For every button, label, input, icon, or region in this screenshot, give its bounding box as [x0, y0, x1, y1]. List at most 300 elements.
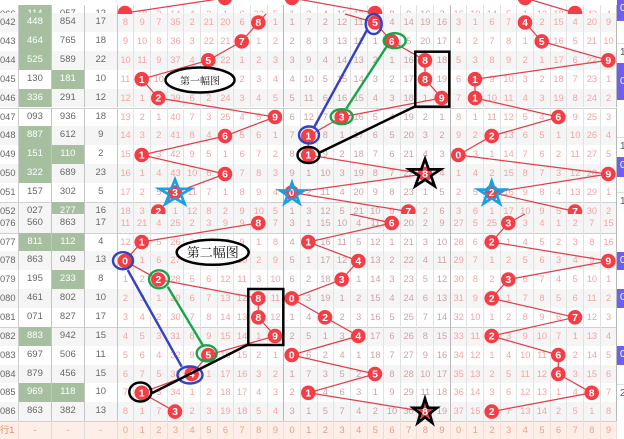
row 050: 3	[339, 168, 345, 178]
row 046: 39	[170, 93, 181, 103]
row 045: 7	[573, 74, 578, 84]
lower balls block two: 2	[322, 312, 328, 324]
row 083	[0, 346, 617, 365]
row 076: 9	[439, 218, 445, 228]
row 051: 9	[256, 187, 261, 197]
footer row: -	[66, 425, 69, 436]
row 050: 3	[556, 168, 561, 178]
row 042: 15	[553, 17, 564, 27]
row 076: 25	[487, 218, 497, 228]
row 043: 2	[273, 36, 278, 46]
row 082: 17	[370, 331, 381, 341]
row 044: 1	[240, 55, 245, 65]
row 050: 10	[320, 168, 331, 178]
row 079: 30	[453, 274, 464, 284]
row 077: 4	[523, 237, 528, 247]
row 085: 7	[606, 387, 611, 397]
row 044: 2	[256, 55, 261, 65]
row 076: 27	[453, 218, 464, 228]
row 051: 23	[403, 187, 414, 197]
row 066 clipped: 12	[354, 9, 364, 19]
label: first figure	[166, 68, 234, 92]
row 086: 7	[156, 406, 161, 416]
row 081: 32	[453, 312, 464, 322]
row 047: 13	[120, 112, 131, 122]
row 042: 042	[0, 17, 16, 27]
lower balls block three: 8	[589, 388, 595, 400]
row 083: 6	[306, 350, 311, 360]
row 078: 1	[306, 255, 311, 265]
lower annotation: black link and box	[129, 289, 283, 402]
upper balls block two	[284, 15, 449, 219]
row 081: 3	[123, 312, 128, 322]
row 048: 2	[156, 130, 161, 140]
row 042: 7	[506, 17, 511, 27]
row 046: 24	[220, 93, 231, 103]
row 049: 42	[170, 149, 181, 159]
footer row: 8	[589, 425, 594, 435]
row 051: 4	[339, 187, 345, 197]
row 043: 2	[289, 36, 295, 46]
row 042: 2	[190, 17, 195, 27]
row 066 clipped: 14	[487, 9, 497, 19]
row 086: 19	[220, 406, 231, 416]
row 080: 29	[170, 293, 181, 303]
row 050: 1	[306, 168, 311, 178]
row 046: 8	[573, 93, 578, 103]
row 084: 2	[489, 368, 495, 378]
row 078: 17	[320, 255, 331, 265]
row 078: 3	[556, 255, 561, 265]
row 084: 5	[156, 368, 161, 378]
row 047: 40	[170, 112, 181, 122]
row 043: 1	[373, 36, 378, 46]
row 042: 4	[573, 17, 578, 27]
row 082: 14	[237, 331, 247, 341]
row 078: 2	[506, 255, 511, 265]
row 044	[0, 51, 617, 70]
row 084: 33	[170, 368, 181, 378]
row 044: 3	[273, 55, 278, 65]
row 049: 5	[206, 149, 211, 159]
row 076: 2	[190, 218, 195, 228]
row 079: 6	[523, 274, 528, 284]
row 046: 18	[403, 93, 414, 103]
row 046: 4	[523, 93, 528, 103]
row 084: 15	[95, 368, 106, 378]
row 086: 863	[27, 405, 43, 416]
row 077: 26	[170, 237, 181, 247]
upper annotation: green link	[331, 33, 406, 124]
upper balls block one: 6	[222, 169, 228, 181]
footer row: 7	[406, 425, 411, 435]
lower balls block one	[118, 216, 282, 419]
lower balls block one: 2	[155, 274, 161, 286]
row 042: 854	[60, 16, 76, 27]
row 076: 3	[289, 218, 295, 228]
row 042: 16	[437, 17, 447, 27]
row 083: 5	[606, 350, 611, 360]
lower balls block three: 2	[489, 406, 495, 418]
row 086: 8	[123, 406, 128, 416]
footer row: 9	[273, 425, 278, 435]
row 043: 13	[337, 36, 347, 46]
row 049: 9	[323, 149, 328, 159]
row 045: 9	[489, 74, 495, 84]
row 079: 12	[220, 274, 231, 284]
row 081: 827	[60, 311, 76, 322]
row 081: 10	[470, 312, 480, 322]
row 044: 5	[456, 55, 461, 65]
row 085: 10	[95, 386, 106, 397]
row 082: 9	[523, 331, 528, 341]
row 077: 3	[423, 237, 428, 247]
row 043: 3	[323, 36, 328, 46]
row 042: 2	[539, 17, 544, 27]
row 076: 15	[603, 218, 614, 228]
row 079: 7	[539, 274, 544, 284]
row 076: 4	[356, 218, 361, 228]
row 086: 1	[589, 406, 594, 416]
row 082: 5	[306, 331, 311, 341]
row 079: 5	[573, 274, 578, 284]
upper balls block two: 8	[422, 169, 428, 181]
row 044: 16	[403, 55, 414, 65]
row 084: 7	[140, 368, 145, 378]
footer row: 0	[289, 425, 295, 435]
footer row: 5	[539, 425, 544, 435]
row 047: 7	[323, 112, 328, 122]
row 085: 29	[403, 387, 414, 397]
row 080: 802	[60, 292, 76, 303]
row 043: 36	[170, 36, 181, 46]
row 081: 25	[403, 312, 414, 322]
row 078: 9	[589, 255, 594, 265]
row 044: 044	[0, 55, 16, 65]
row 077: 12	[120, 237, 131, 247]
row 084: 456	[60, 368, 76, 378]
row 044: 18	[437, 55, 447, 65]
row 066 clipped: 2	[439, 9, 445, 19]
upper balls block two: 0	[289, 187, 295, 199]
row 049: 7	[523, 149, 528, 159]
row 050: 1	[140, 168, 145, 178]
row 076: 3	[523, 218, 528, 228]
row 048: 4	[206, 130, 211, 140]
row 085: 4	[323, 387, 328, 397]
row 077: 077	[0, 237, 16, 247]
row 050: 10	[187, 168, 197, 178]
row 047: 19	[403, 112, 414, 122]
footer row: 1	[140, 425, 145, 435]
row 045: 3	[256, 74, 261, 84]
row 047: 11	[487, 112, 497, 122]
row 043: 21	[587, 36, 597, 46]
row 077: 11	[337, 237, 347, 247]
row 044: 4	[190, 55, 195, 65]
row 081: 4	[306, 312, 311, 322]
row 084: 3	[573, 368, 578, 378]
row 076: 3	[206, 218, 211, 228]
row 045: 1	[606, 74, 611, 84]
row 084: 2	[356, 368, 361, 378]
row 082: 3	[506, 331, 511, 341]
row 082: 4	[606, 331, 611, 341]
row 079: 11	[237, 274, 247, 284]
row 043: 10	[603, 36, 614, 46]
footer row: 7	[240, 425, 245, 435]
row 080: 3	[140, 293, 145, 303]
row 050: 16	[120, 168, 131, 178]
row 086: 8	[606, 406, 611, 416]
row 076: 15	[320, 218, 331, 228]
footer row: 0	[456, 425, 461, 435]
row 046: 11	[504, 93, 513, 103]
row 082: 31	[170, 331, 181, 341]
row 083: 083	[0, 350, 16, 360]
row 082: 883	[27, 330, 43, 341]
row 078: 13	[370, 255, 381, 265]
footer row: 6	[556, 425, 561, 435]
lower balls block three: 6	[555, 369, 561, 381]
row 076: 9	[223, 218, 228, 228]
row 046: 1	[140, 93, 145, 103]
row 049: 9	[190, 149, 195, 159]
row 076: 1	[556, 218, 561, 228]
row 066 clipped: 18	[553, 9, 564, 19]
row 086: 2	[373, 406, 378, 416]
row 066 clipped: 1	[523, 9, 528, 19]
row 078: 29	[453, 255, 464, 265]
row 077: 112	[60, 236, 75, 247]
row 050: 8	[523, 168, 528, 178]
row 084: 084	[0, 368, 16, 378]
row 082: 1	[256, 331, 261, 341]
row 078: 6	[539, 255, 544, 265]
row 080: 080	[0, 293, 16, 303]
row 081: 5	[389, 312, 395, 322]
footer row	[0, 421, 617, 439]
row 050: 15	[503, 168, 514, 178]
row 049: 6	[539, 149, 544, 159]
row 083: 6	[140, 350, 145, 360]
row 048: 048	[0, 130, 16, 140]
row 066 clipped: 9	[406, 9, 411, 19]
row 046: 4	[256, 93, 261, 103]
lower annotation: green link	[149, 270, 217, 361]
row 076: 1	[306, 218, 311, 228]
row 086: 3	[206, 406, 211, 416]
row 086: 5	[573, 406, 578, 416]
row 042: 448	[27, 16, 43, 27]
row 083: 11	[537, 350, 547, 360]
row 086: 7	[339, 406, 345, 416]
row 086: 19	[437, 406, 447, 416]
row 045: 045	[0, 74, 16, 84]
row 048: 1	[273, 130, 278, 140]
row 045: 17	[403, 74, 414, 84]
row 050: 28	[587, 168, 597, 178]
row 043: 2	[473, 36, 478, 46]
row 080: 2	[123, 293, 128, 303]
upper balls block three: 2	[489, 187, 495, 199]
row 043: 9	[123, 36, 128, 46]
row 066 clipped: 16	[453, 9, 464, 19]
row 066 clipped: 10	[470, 9, 480, 19]
row 066 clipped: 5	[273, 9, 278, 19]
lower balls block one: 1	[139, 237, 145, 249]
row 085: 9	[389, 387, 395, 397]
row 080: 10	[95, 292, 106, 303]
row 046: 15	[354, 93, 364, 103]
upper balls block three: 6	[555, 112, 561, 124]
row 047: 12	[503, 112, 514, 122]
row 084: 8	[389, 368, 395, 378]
row 045: 2	[240, 74, 245, 84]
row 080: 1	[156, 293, 161, 303]
row 048: 14	[120, 130, 131, 140]
lower balls block two: 4	[355, 331, 361, 343]
row 081: 14	[437, 312, 447, 322]
row 077: 2	[556, 237, 561, 247]
row 049: 21	[403, 149, 414, 159]
footer row: 6	[389, 425, 395, 435]
row 043: 8	[506, 36, 511, 46]
upper balls block one: 1	[139, 74, 145, 86]
row 081: 2	[339, 312, 345, 322]
row 079: 8	[473, 274, 478, 284]
row 083: 18	[370, 350, 381, 360]
upper trace lines	[142, 14, 608, 212]
row 077: 1	[256, 237, 261, 247]
footer row: 1	[473, 425, 478, 435]
row 082: 8	[423, 331, 428, 341]
row 085: 118	[60, 386, 75, 397]
row 084: 16	[237, 368, 247, 378]
lower balls block two: 1	[305, 237, 311, 249]
row 066 clipped: 8	[389, 9, 395, 19]
row 078: 6	[156, 255, 161, 265]
row 047: 5	[523, 112, 528, 122]
lower balls block one: 8	[255, 293, 261, 305]
row 086: 2	[190, 406, 195, 416]
row 051: 1	[223, 187, 228, 197]
label: second figure	[177, 240, 249, 265]
row 042: 4	[389, 17, 395, 27]
footer row: 7	[573, 425, 578, 435]
row 085: 4	[256, 387, 261, 397]
row 050: 6	[206, 168, 211, 178]
row 078: 9	[273, 255, 278, 265]
row 044: 3	[473, 55, 478, 65]
row 049: 6	[389, 149, 395, 159]
row 077: 21	[403, 237, 414, 247]
row 050: 12	[570, 168, 580, 178]
row 085: 4	[573, 387, 578, 397]
row 084: 15	[587, 368, 597, 378]
row 077: 811	[27, 236, 43, 247]
row 051: 1	[423, 187, 428, 197]
upper balls block two: 8	[422, 74, 428, 86]
lower balls block two: 8	[422, 406, 428, 418]
footer row: 5	[373, 425, 378, 435]
row 085: 18	[220, 387, 231, 397]
row 049: 15	[120, 149, 131, 159]
row 077: 5	[356, 237, 361, 247]
row 046: 046	[0, 93, 16, 103]
row 042: 9	[606, 17, 611, 27]
row 051: 2	[456, 187, 461, 197]
row 049: 1	[223, 149, 228, 159]
footer row: 3	[506, 425, 511, 435]
row 046: 24	[587, 93, 597, 103]
upper balls block three: 9	[605, 55, 611, 67]
row 077: 6	[473, 237, 478, 247]
row 046	[0, 89, 617, 107]
row 051: 11	[187, 187, 197, 197]
row 084: 6	[606, 368, 611, 378]
row 043: 12	[354, 36, 364, 46]
row 045: 5	[190, 74, 195, 84]
row 085: 1	[373, 387, 378, 397]
row 043: 10	[137, 36, 147, 46]
row 079: 5	[190, 274, 195, 284]
row 049: 2	[273, 149, 278, 159]
row 044: 9	[506, 55, 511, 65]
row 050: 8	[256, 168, 261, 178]
footer row: 5	[206, 425, 211, 435]
row 079	[0, 270, 617, 289]
row 042: 8	[123, 17, 128, 27]
row 079: 10	[587, 274, 597, 284]
row 049: 5	[606, 149, 611, 159]
row 049: 7	[373, 149, 378, 159]
upper balls block two: 1	[305, 131, 311, 143]
row 080: 8	[539, 293, 544, 303]
row 084: 5	[506, 368, 511, 378]
row 084: 35	[453, 368, 464, 378]
row 084: 11	[520, 368, 530, 378]
row 066 clipped: 10	[137, 9, 147, 19]
upper balls block three: 1	[472, 74, 478, 86]
row 051: 11	[321, 187, 330, 197]
upper balls block two: 3	[339, 112, 345, 124]
row 085: 18	[437, 387, 447, 397]
row 083: 1	[489, 350, 495, 360]
row 081: 4	[140, 312, 145, 322]
footer row: 2	[489, 425, 495, 435]
lower balls block one: 5	[205, 350, 211, 362]
row 048: 6	[523, 130, 528, 140]
row 049: 1	[489, 149, 495, 159]
row 047: 936	[60, 110, 76, 122]
row 048: 7	[289, 130, 295, 140]
row 045: 18	[553, 74, 564, 84]
footer row: 行1	[0, 425, 14, 435]
row 045: 3	[523, 74, 528, 84]
row 084: 6	[123, 368, 128, 378]
row 044: 22	[587, 55, 597, 65]
row 046: 12	[95, 92, 106, 103]
row 045: 10	[304, 74, 314, 84]
row 077: 8	[273, 237, 278, 247]
row 077: 1	[506, 237, 511, 247]
row 048: 20	[403, 130, 414, 140]
row 076: 20	[403, 218, 414, 228]
row 081: 3	[356, 312, 361, 322]
row 048: 4	[606, 130, 611, 140]
row 049: 27	[587, 149, 597, 159]
